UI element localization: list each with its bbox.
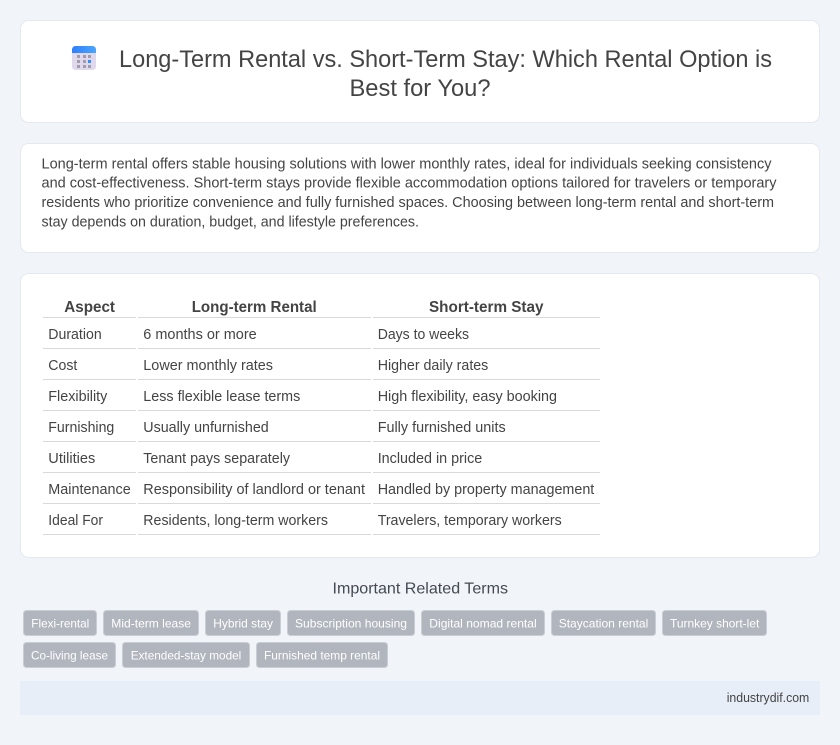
table row: Cost — [43, 358, 600, 380]
tag: Flexi-rental: Flexi-rental — [31, 616, 89, 630]
panel: comparison table — [20, 274, 820, 558]
tag: Turnkey short-let — [662, 610, 766, 636]
title — [119, 46, 772, 102]
table row: Duration — [43, 327, 600, 349]
table row: Ideal For: Travelers, temporary workers — [378, 513, 562, 529]
tag: Subscription housing — [288, 610, 414, 636]
tag: Subscription housing: Subscription housing — [295, 616, 407, 630]
footer: industrydif.com — [727, 690, 809, 705]
text block: summary paragraph: Long-term rental offers stable housing solutions with lower monthly rates, ideal for individuals seeking consistency — [42, 156, 772, 172]
table row: Ideal For: Ideal For — [48, 513, 103, 529]
table header row — [43, 299, 600, 318]
table row: Utilities: Tenant pays separately — [143, 451, 291, 467]
tag: Staycation rental — [552, 610, 656, 636]
tag: Digital nomad rental — [422, 610, 544, 636]
footer — [20, 681, 820, 715]
table row: Duration: Duration — [48, 327, 102, 343]
tag: Digital nomad rental: Digital nomad rental — [429, 616, 537, 630]
table row: Furnishing: Furnishing — [48, 420, 114, 436]
tag: Hybrid stay: Hybrid stay — [213, 616, 273, 630]
tag: Staycation rental: Staycation rental — [559, 616, 648, 630]
text block: summary paragraph: residents who prioritize convenience and fully furnished spaces. Choosing between long-term rental and short-term — [42, 195, 774, 211]
panel: introduction text — [20, 144, 820, 252]
text block: summary paragraph — [42, 156, 777, 231]
tag: Extended-stay model — [122, 642, 250, 668]
table row: Maintenance: Handled by property management — [378, 482, 594, 498]
table row: Utilities: Utilities — [48, 451, 95, 467]
table row: Ideal For: Residents, long-term workers — [143, 513, 328, 529]
table row: Utilities — [43, 451, 600, 473]
table row: Cost: Higher daily rates — [378, 358, 488, 374]
table row: Flexibility: High flexibility, easy booking — [378, 389, 557, 405]
table row: Furnishing: Fully furnished units — [378, 420, 506, 436]
table header row: Aspect — [64, 299, 116, 316]
table header row: Long-term Rental — [192, 299, 317, 316]
table row: Flexibility: Less flexible lease terms — [143, 389, 300, 405]
icon: calendar — [72, 46, 96, 70]
tag: Co-living lease — [24, 642, 116, 668]
table row: Flexibility — [43, 389, 600, 411]
table row: Maintenance: Maintenance — [48, 482, 131, 498]
table row: Furnishing: Usually unfurnished — [143, 420, 269, 436]
table row: Cost: Cost — [48, 358, 77, 374]
table row: Ideal For — [43, 513, 600, 535]
tag: Furnished temp rental: Furnished temp rental — [264, 648, 380, 662]
text block: summary paragraph: stay depends on duration, budget, and lifestyle preferences. — [42, 215, 419, 231]
tag: Hybrid stay — [206, 610, 280, 636]
tag: Furnished temp rental — [256, 642, 388, 668]
tag: Mid-term lease: Mid-term lease — [111, 616, 191, 630]
panel: header — [20, 20, 820, 122]
tag: Turnkey short-let: Turnkey short-let — [670, 616, 760, 630]
title: Best for You? — [350, 75, 490, 102]
tag: Flexi-rental — [24, 610, 96, 636]
tag: Extended-stay model: Extended-stay model — [131, 648, 241, 662]
table row: Maintenance: Responsibility of landlord or tenant — [143, 482, 365, 498]
table header row: Short-term Stay — [429, 299, 544, 316]
tag: Co-living lease: Co-living lease — [31, 648, 108, 662]
table row: Duration: Days to weeks — [378, 327, 469, 343]
tag: Mid-term lease — [104, 610, 198, 636]
related term tags — [24, 610, 766, 668]
table row: Duration: 6 months or more — [143, 327, 257, 343]
table row: Furnishing — [43, 420, 600, 442]
title: Long-Term Rental vs. Short-Term Stay: Which Rental Option is — [119, 46, 772, 73]
table row: Maintenance — [43, 482, 600, 504]
text block: summary paragraph: and cost-effectiveness. Short-term stays provide flexible accommodation options tailored for travelers or temporary — [42, 176, 777, 192]
table row: Utilities: Included in price — [378, 451, 482, 467]
table row: Flexibility: Flexibility — [48, 389, 108, 405]
table row: Cost: Lower monthly rates — [143, 358, 273, 374]
heading: important related terms: Important Related Terms — [332, 580, 508, 597]
